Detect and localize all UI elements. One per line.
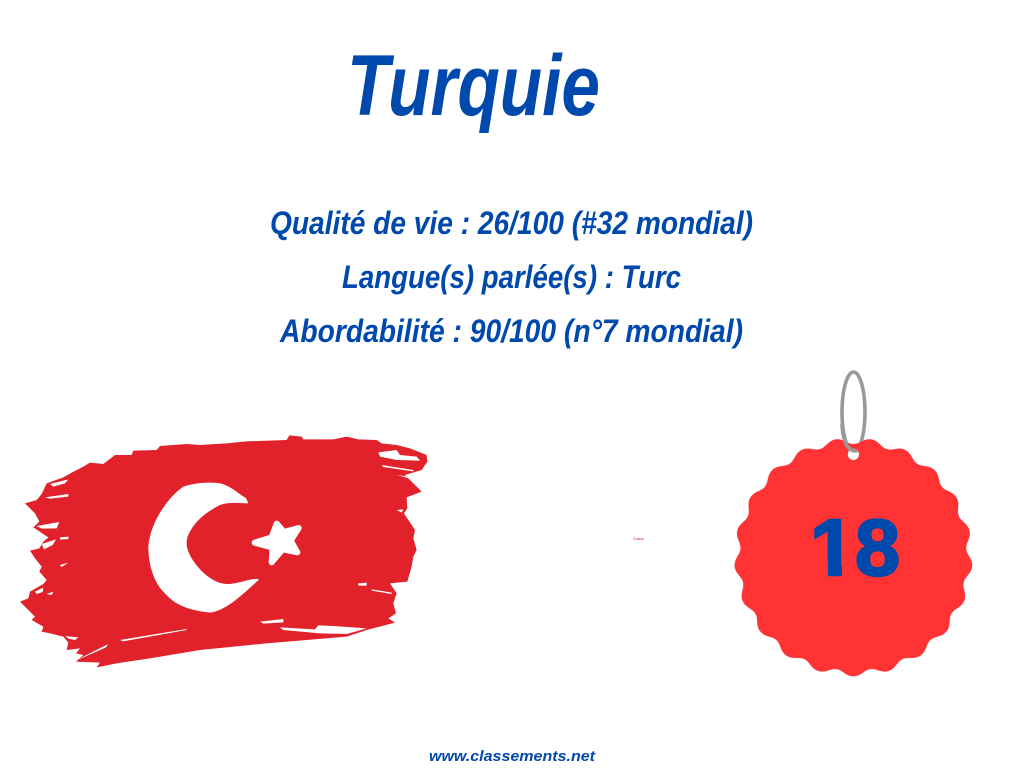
flag brush texture	[35, 450, 420, 660]
quality of life line: Qualité de vie : 26/100 (#32 mondial)	[270, 205, 753, 241]
scalloped tag	[733, 437, 973, 676]
icon: painted Turkish flag	[20, 435, 427, 667]
crescent	[148, 483, 259, 613]
mask: left foot of digit one	[806, 562, 828, 578]
tiny caption: Guides	[633, 536, 644, 541]
mask: right foot of digit one	[842, 562, 854, 578]
rank number: 18	[810, 503, 900, 592]
ring behind the tag	[842, 372, 865, 452]
ring front	[842, 425, 856, 451]
footer website: www.classements.net	[429, 748, 596, 765]
text block: country facts	[270, 205, 753, 349]
badge: rank tag	[733, 372, 973, 676]
star	[255, 524, 299, 562]
flag brush stroke	[20, 435, 427, 667]
tag hole	[848, 449, 859, 460]
languages line: Langue(s) parlée(s) : Turc	[342, 259, 681, 295]
title: Turquie	[347, 38, 600, 134]
affordability line: Abordabilité : 90/100 (n°7 mondial)	[279, 313, 743, 349]
